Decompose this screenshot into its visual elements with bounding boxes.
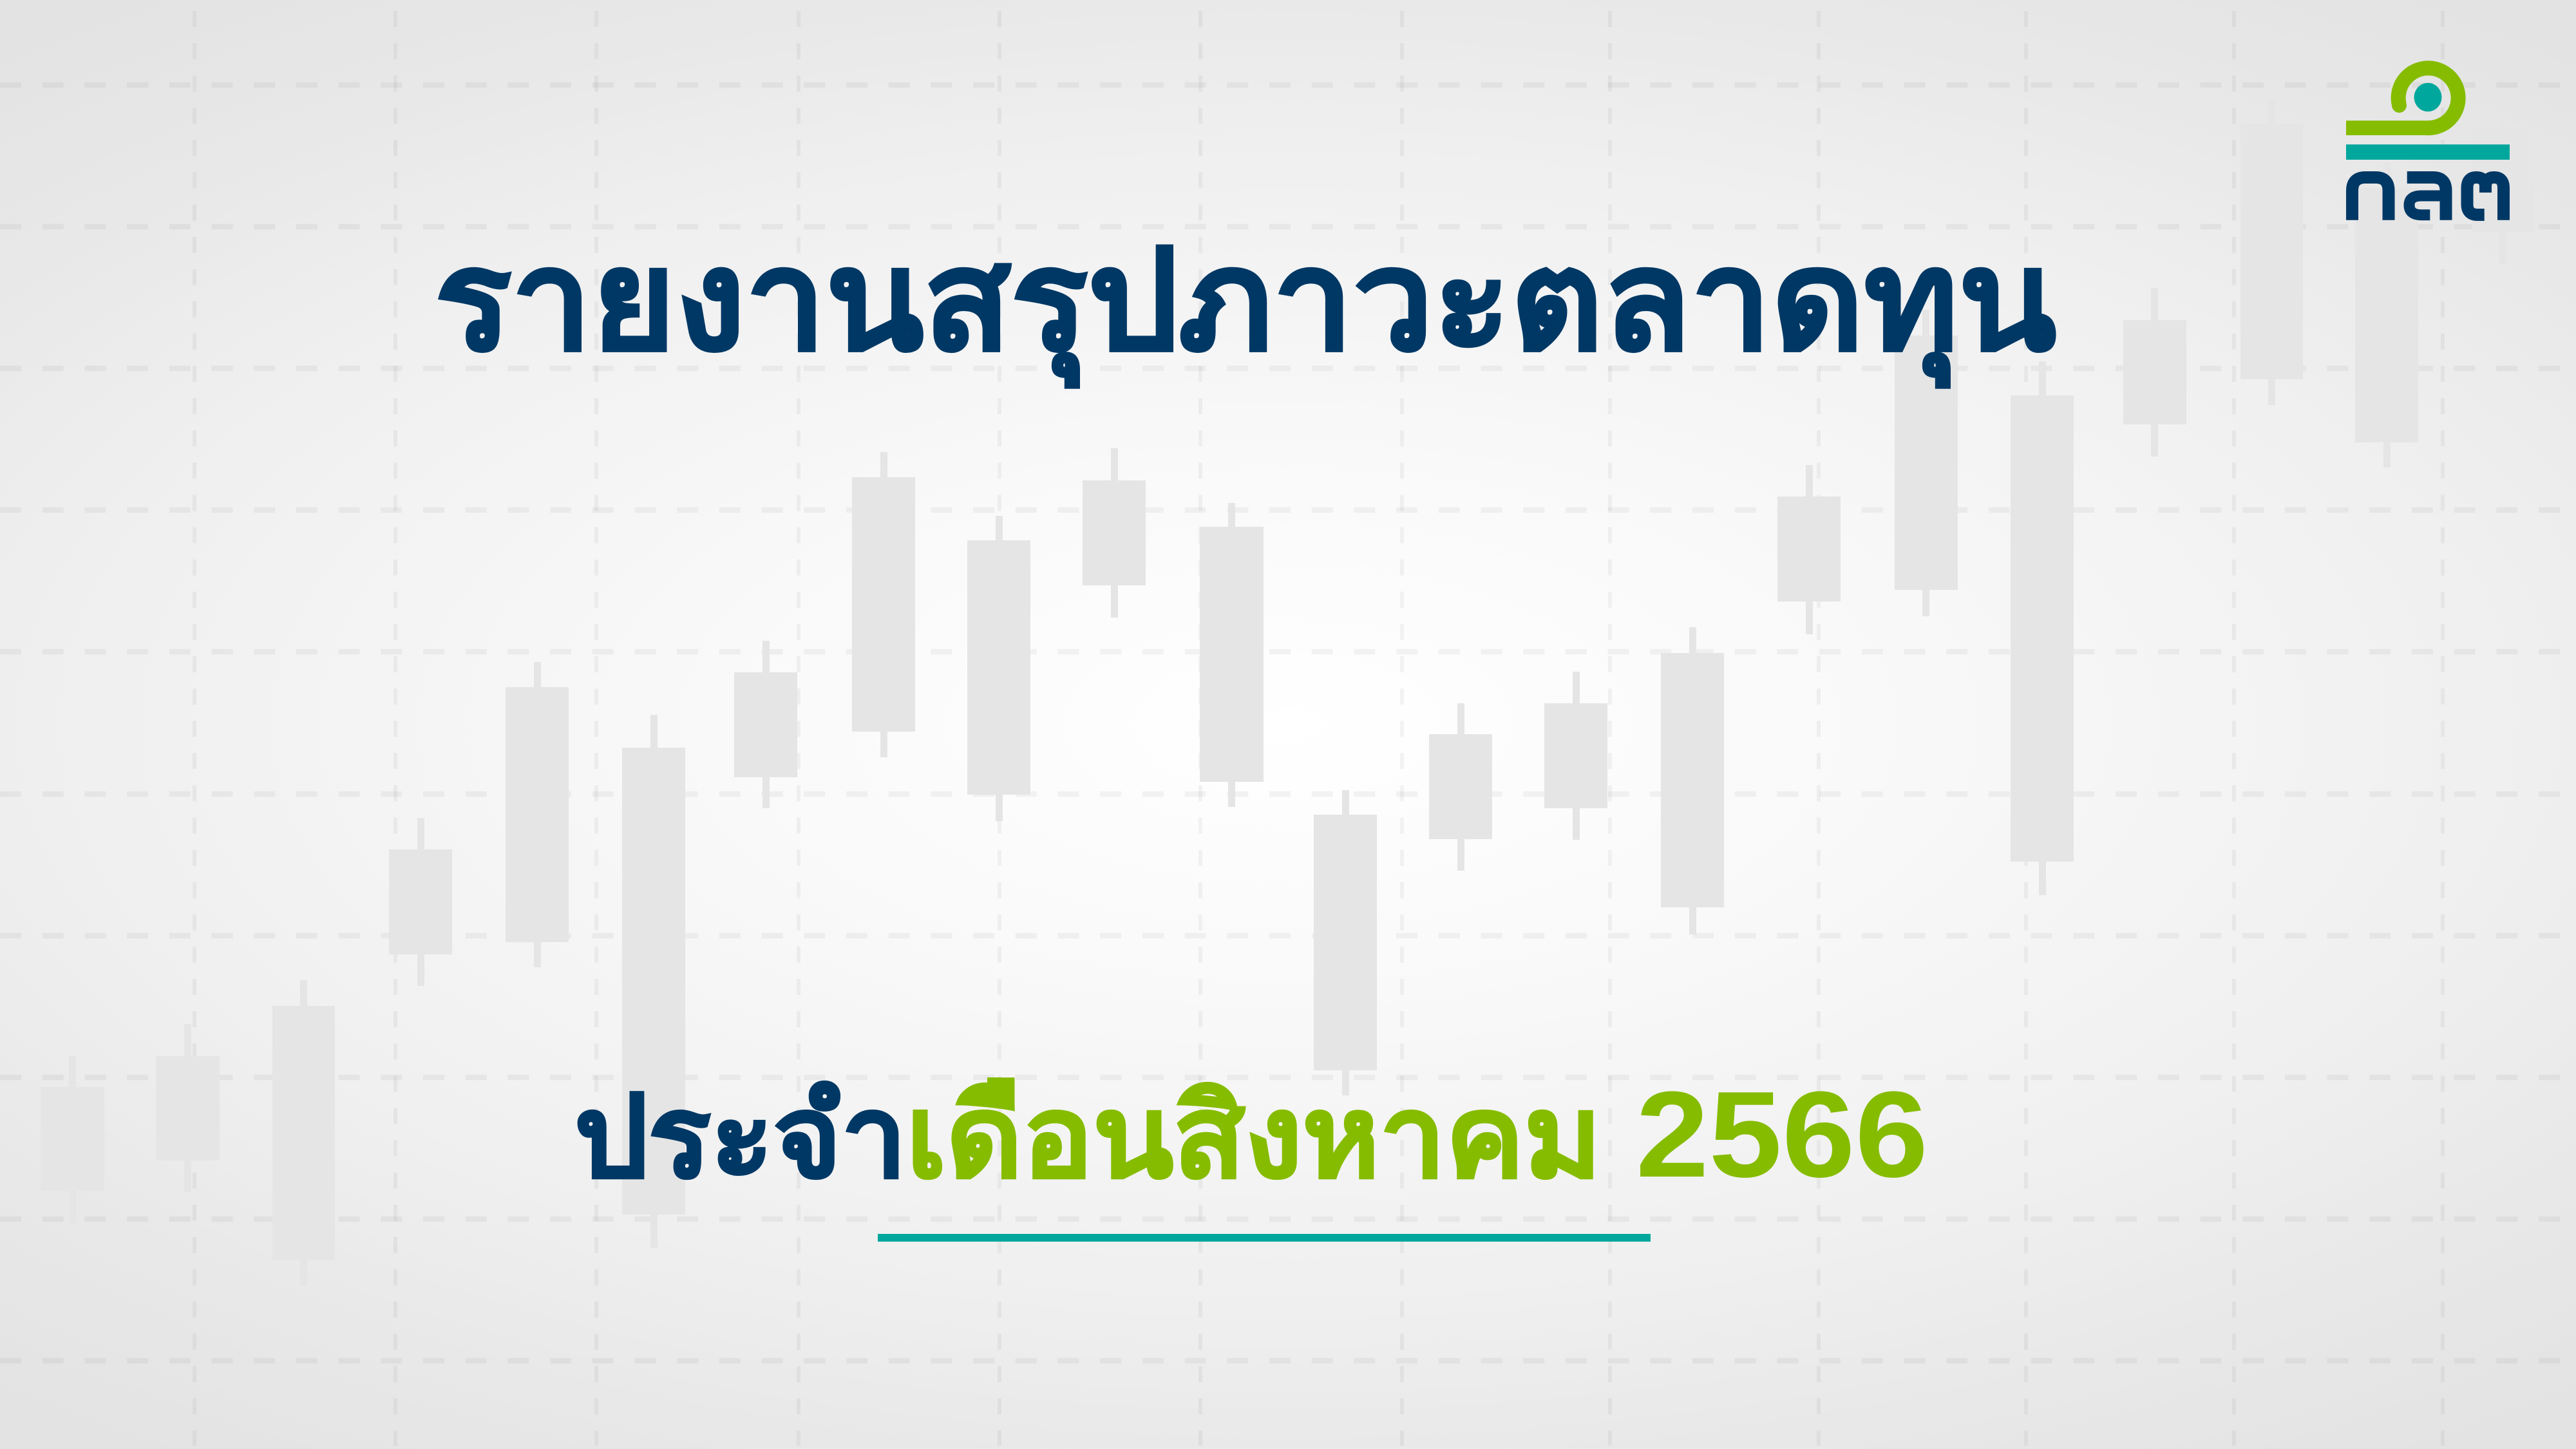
- logo dot: [2414, 83, 2442, 111]
- logo icon: green swirl: [2346, 68, 2458, 135]
- logo: SEC Thailand: [2346, 68, 2510, 220]
- logo wordmark letters: [2352, 178, 2504, 220]
- logo bar: [2346, 144, 2510, 160]
- title: รายงานสรุปภาวะตลาดทุน: [435, 223, 2056, 388]
- subtitle: year: 2566: [1636, 1066, 1928, 1203]
- candlestick chart: [41, 97, 2535, 1285]
- underline: [878, 1234, 1651, 1242]
- subtitle: [574, 1066, 1928, 1203]
- subtitle: month: เดือนสิงหาคม: [906, 1073, 1602, 1201]
- subtitle: prefix: ประจำ: [574, 1073, 907, 1201]
